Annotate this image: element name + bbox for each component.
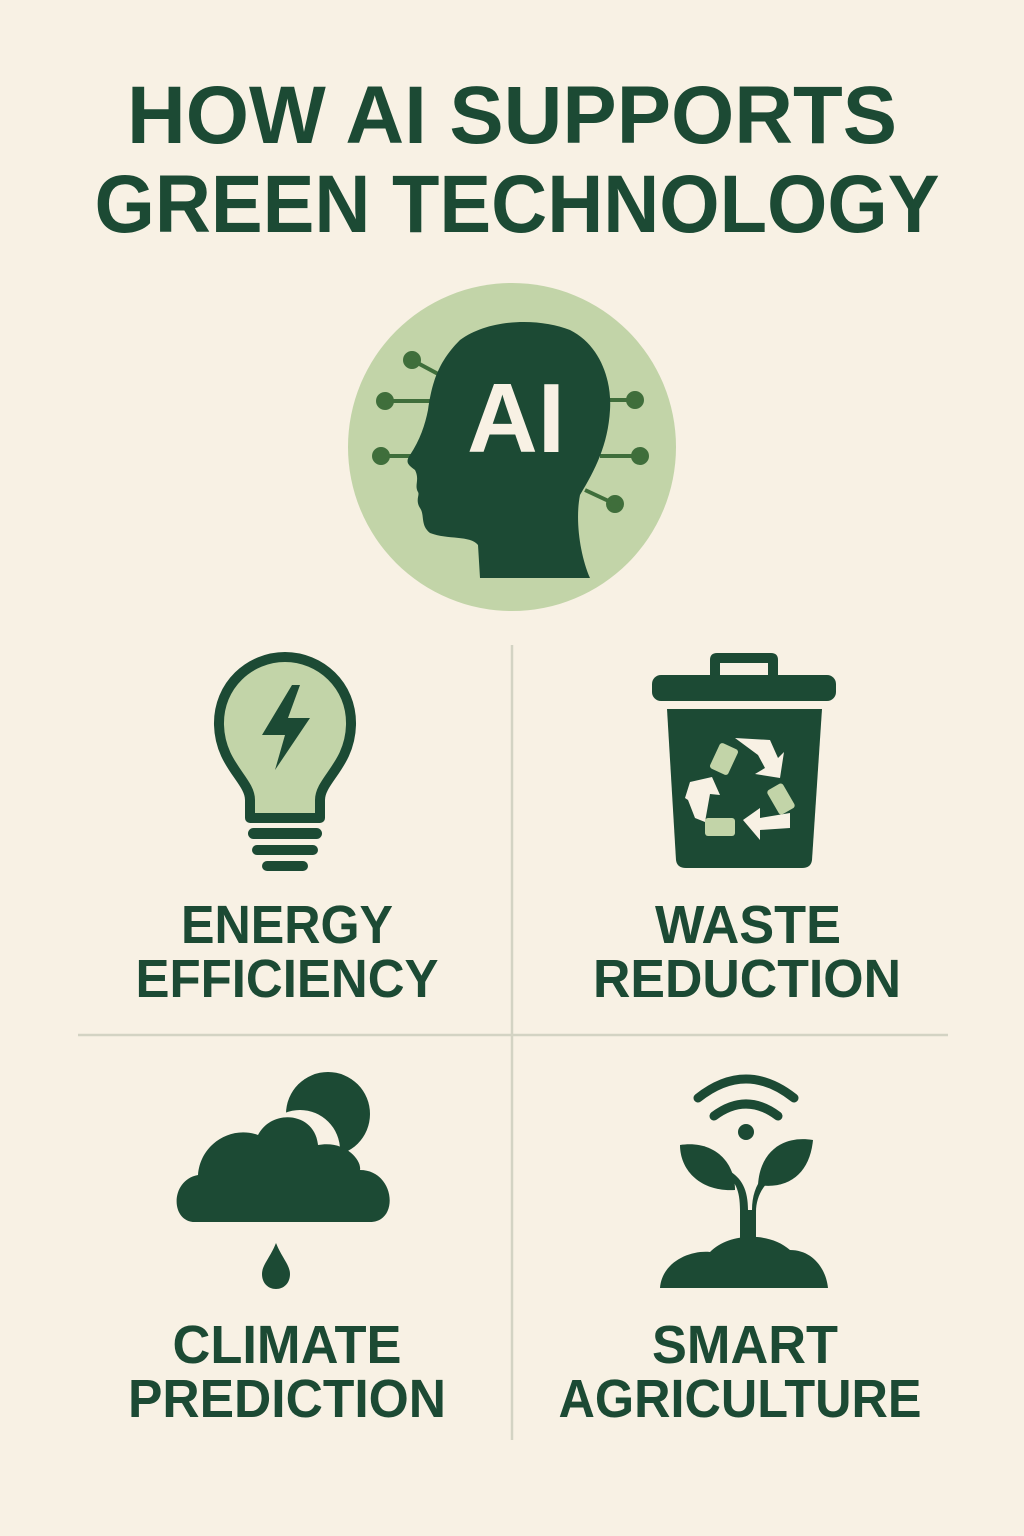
- panel: waste reduction: [593, 653, 901, 1009]
- icon: AI head: AI: [467, 363, 565, 473]
- title: HOW AI SUPPORTS: [127, 70, 897, 161]
- icon: sprout with signal: [660, 1079, 828, 1288]
- label: smart agriculture: AGRICULTURE: [558, 1369, 922, 1429]
- label: energy efficiency: EFFICIENCY: [136, 949, 438, 1009]
- label: energy efficiency: [136, 895, 438, 1009]
- label: energy efficiency: ENERGY: [181, 895, 393, 955]
- label: climate prediction: CLIMATE: [172, 1315, 402, 1375]
- panel: smart agriculture: [558, 1079, 922, 1429]
- icon: recycle bin: [652, 653, 836, 868]
- label: smart agriculture: [558, 1315, 922, 1429]
- title: GREEN TECHNOLOGY: [94, 159, 940, 250]
- icon: light bulb: [219, 657, 351, 871]
- label: climate prediction: [128, 1315, 446, 1429]
- label: waste reduction: WASTE: [655, 895, 841, 955]
- dividers: [78, 645, 948, 1440]
- label: climate prediction: PREDICTION: [128, 1369, 446, 1429]
- label: waste reduction: REDUCTION: [593, 949, 901, 1009]
- label: waste reduction: [593, 895, 901, 1009]
- panel: climate prediction: [128, 1072, 446, 1429]
- title: [94, 70, 940, 250]
- icon: cloud with sun and rain: [177, 1072, 390, 1289]
- label: smart agriculture: SMART: [652, 1315, 838, 1375]
- icon: AI head: [348, 283, 676, 611]
- panel: energy efficiency: [136, 657, 438, 1009]
